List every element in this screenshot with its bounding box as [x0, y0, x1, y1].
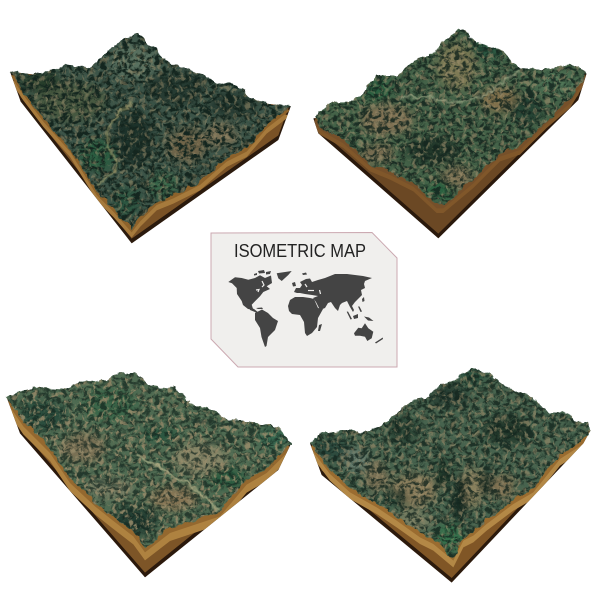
soil layers — [10, 72, 291, 244]
islands — [254, 270, 383, 344]
world map — [228, 270, 383, 347]
terrain block: top left — [10, 32, 291, 244]
terrain block: bottom right — [310, 368, 590, 582]
inland waters — [256, 281, 320, 294]
greenland — [277, 271, 292, 281]
road — [137, 455, 218, 510]
terrain surface — [315, 28, 586, 205]
terrain block: bottom left — [6, 372, 292, 578]
terrain surface — [6, 372, 292, 548]
south america — [255, 310, 278, 347]
card background — [211, 232, 397, 367]
madagascar — [318, 324, 322, 331]
map card — [211, 232, 397, 367]
africa — [288, 297, 323, 336]
australia — [354, 323, 373, 341]
eurasia — [294, 274, 372, 312]
terrain surface — [310, 368, 590, 558]
soil layers — [7, 398, 290, 578]
dark valleys — [80, 418, 253, 485]
road — [97, 102, 133, 185]
central america — [249, 307, 262, 315]
soil layers — [310, 430, 590, 582]
soil layers — [314, 74, 586, 238]
terrain block: top right — [314, 28, 586, 238]
north america — [228, 275, 272, 310]
road — [400, 70, 520, 103]
terrain surface — [10, 32, 291, 230]
title: ISOMETRIC MAP — [234, 240, 366, 261]
